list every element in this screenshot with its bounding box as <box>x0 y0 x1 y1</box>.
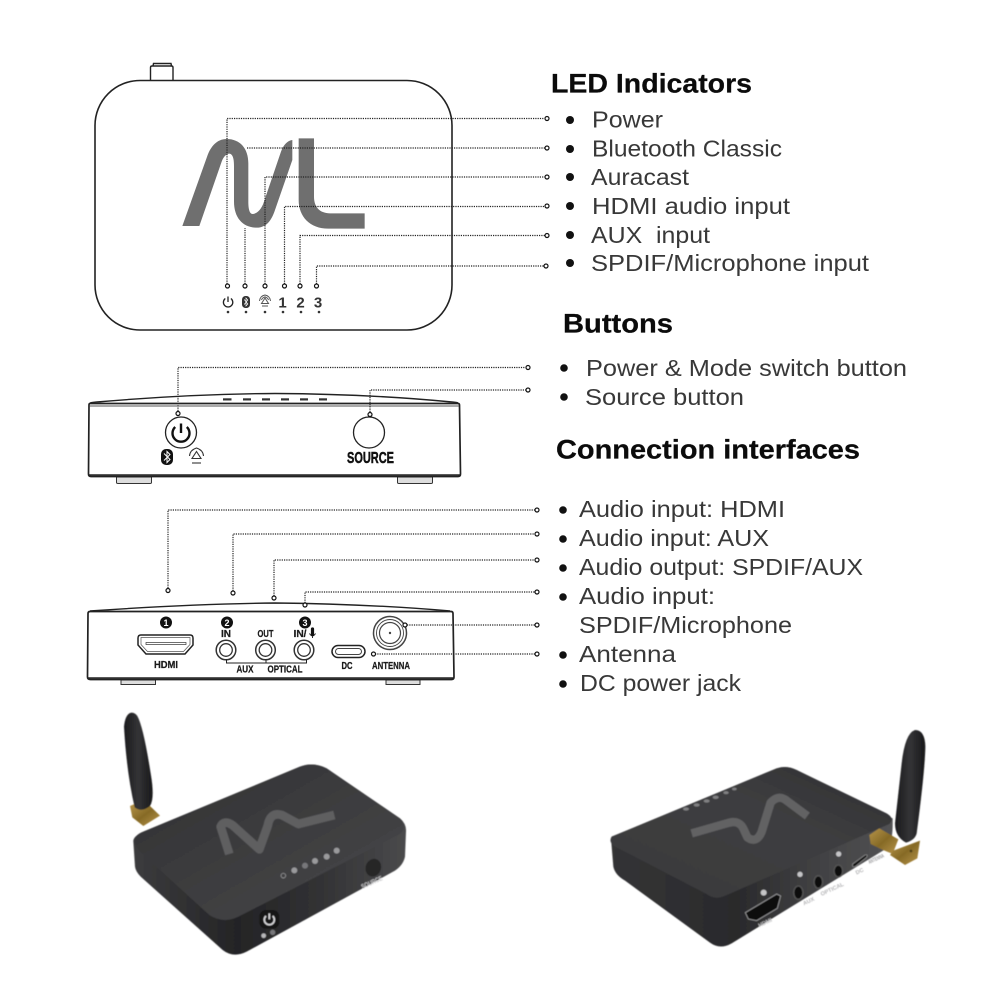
number badge 2 <box>221 616 233 628</box>
label: LED number 2: 2 <box>296 294 305 312</box>
diagram: front view of device <box>88 366 530 484</box>
label: HDMI: HDMI <box>154 660 178 671</box>
photo: device rear with antenna <box>610 730 925 947</box>
number badge 1: 1 <box>163 618 169 628</box>
LED dots <box>683 788 737 811</box>
antenna <box>895 730 925 843</box>
feet <box>116 477 432 484</box>
port labels: ANTENNA <box>868 853 885 866</box>
number badge 3: 3 <box>302 618 308 628</box>
label: DC: DC <box>342 661 352 672</box>
list: connection interfaces: Audio input: <box>579 583 715 609</box>
device body sides <box>133 765 406 955</box>
port labels: OPTICAL <box>820 882 846 898</box>
list: LED indicators: Bluetooth Classic <box>592 136 782 162</box>
list: connection interfaces: Audio input: AUX <box>579 525 769 551</box>
leader lines: LED indicators <box>226 116 549 288</box>
label: OUT: OUT <box>258 629 274 640</box>
LED icon row <box>223 294 322 313</box>
leader lines: buttons <box>176 366 530 416</box>
diagram: back view of device <box>88 508 539 684</box>
list: connection interfaces <box>559 496 863 696</box>
section: LED indicators text <box>551 68 870 276</box>
source button <box>354 417 384 448</box>
list: LED indicators: Power <box>592 106 663 132</box>
device top surface <box>134 765 404 920</box>
list: buttons: Power & Mode switch button <box>586 355 907 381</box>
port labels: HDMI <box>758 917 774 929</box>
port: HDMI <box>745 894 781 921</box>
label: LED number 3: 3 <box>314 294 322 312</box>
antenna connector nub <box>150 64 173 80</box>
port labels: DC <box>855 868 865 876</box>
label: SOURCE: SOURCE <box>360 875 384 891</box>
device top surface <box>610 767 892 898</box>
list: connection interfaces: SPDIF/Microphone <box>579 612 792 638</box>
source button <box>363 857 384 879</box>
device body <box>88 612 454 680</box>
ML logo <box>182 138 365 229</box>
photo: device front with antenna <box>124 713 406 955</box>
device outline <box>95 80 452 330</box>
heading: Buttons: Buttons <box>563 308 673 338</box>
device body sides <box>611 767 893 947</box>
power button <box>259 910 279 938</box>
icon: power LED <box>223 296 233 307</box>
brass connector <box>869 828 920 865</box>
label: IN with microphone <box>294 629 316 640</box>
LED icons <box>281 848 340 878</box>
audio jacks <box>216 640 314 660</box>
port labels: AUX <box>802 897 816 907</box>
leader lines: connection interfaces <box>166 508 539 656</box>
port: HDMI <box>138 635 193 654</box>
list: buttons <box>560 355 907 410</box>
label: OPTICAL: OPTICAL <box>268 664 302 676</box>
engraved logo <box>692 798 807 840</box>
label: LED number 1: 1 <box>278 294 287 312</box>
heading: LED Indicators: LED Indicators <box>551 68 752 98</box>
LED slots <box>223 398 327 400</box>
list: connection interfaces: Audio output: SPDIF/AUX <box>579 554 863 580</box>
AUX and OPTICAL bracket <box>226 660 306 663</box>
number badge 1 <box>160 616 172 628</box>
list: LED indicators: HDMI audio input <box>592 193 791 219</box>
LED dots <box>227 311 320 313</box>
top lid curve <box>90 603 450 611</box>
list: LED indicators: Auracast <box>591 164 690 190</box>
list: connection interfaces: Antenna <box>579 641 676 667</box>
top lid curve <box>90 394 458 403</box>
icon: bluetooth LED <box>242 296 250 308</box>
brass connector <box>130 803 160 826</box>
section: Connection interfaces text <box>556 434 863 696</box>
antenna <box>124 713 153 810</box>
icon: bluetooth <box>161 449 173 465</box>
list: connection interfaces: DC power jack <box>580 670 742 696</box>
label: IN: IN <box>221 629 231 640</box>
port: DC <box>852 855 867 867</box>
port labels <box>758 851 885 929</box>
feet <box>121 680 420 684</box>
label: SOURCE: SOURCE <box>347 450 394 467</box>
label: AUX: AUX <box>236 664 254 676</box>
list: LED indicators <box>566 106 870 276</box>
list: LED indicators: SPDIF/Microphone input <box>591 250 870 276</box>
number badge 3 <box>299 616 311 628</box>
engraved logo <box>221 814 334 854</box>
diagram: top view of device <box>95 64 549 330</box>
power button <box>166 417 196 448</box>
label: ANTENNA: ANTENNA <box>372 661 410 672</box>
section: Buttons text <box>560 308 907 410</box>
list: buttons: Source button <box>585 384 744 410</box>
list: LED indicators: AUX input <box>591 222 711 248</box>
audio jacks <box>794 865 843 899</box>
icon: auracast LED <box>260 295 270 306</box>
label: IN with microphone: IN/ <box>294 629 307 640</box>
device body <box>88 404 460 476</box>
heading: Connection interfaces: Connection interfaces <box>556 434 860 464</box>
icon: auracast <box>190 448 204 463</box>
list: connection interfaces: Audio input: HDMI <box>579 496 785 522</box>
number badge 2: 2 <box>224 618 230 628</box>
port: DC <box>332 646 365 658</box>
port: antenna <box>374 616 406 650</box>
